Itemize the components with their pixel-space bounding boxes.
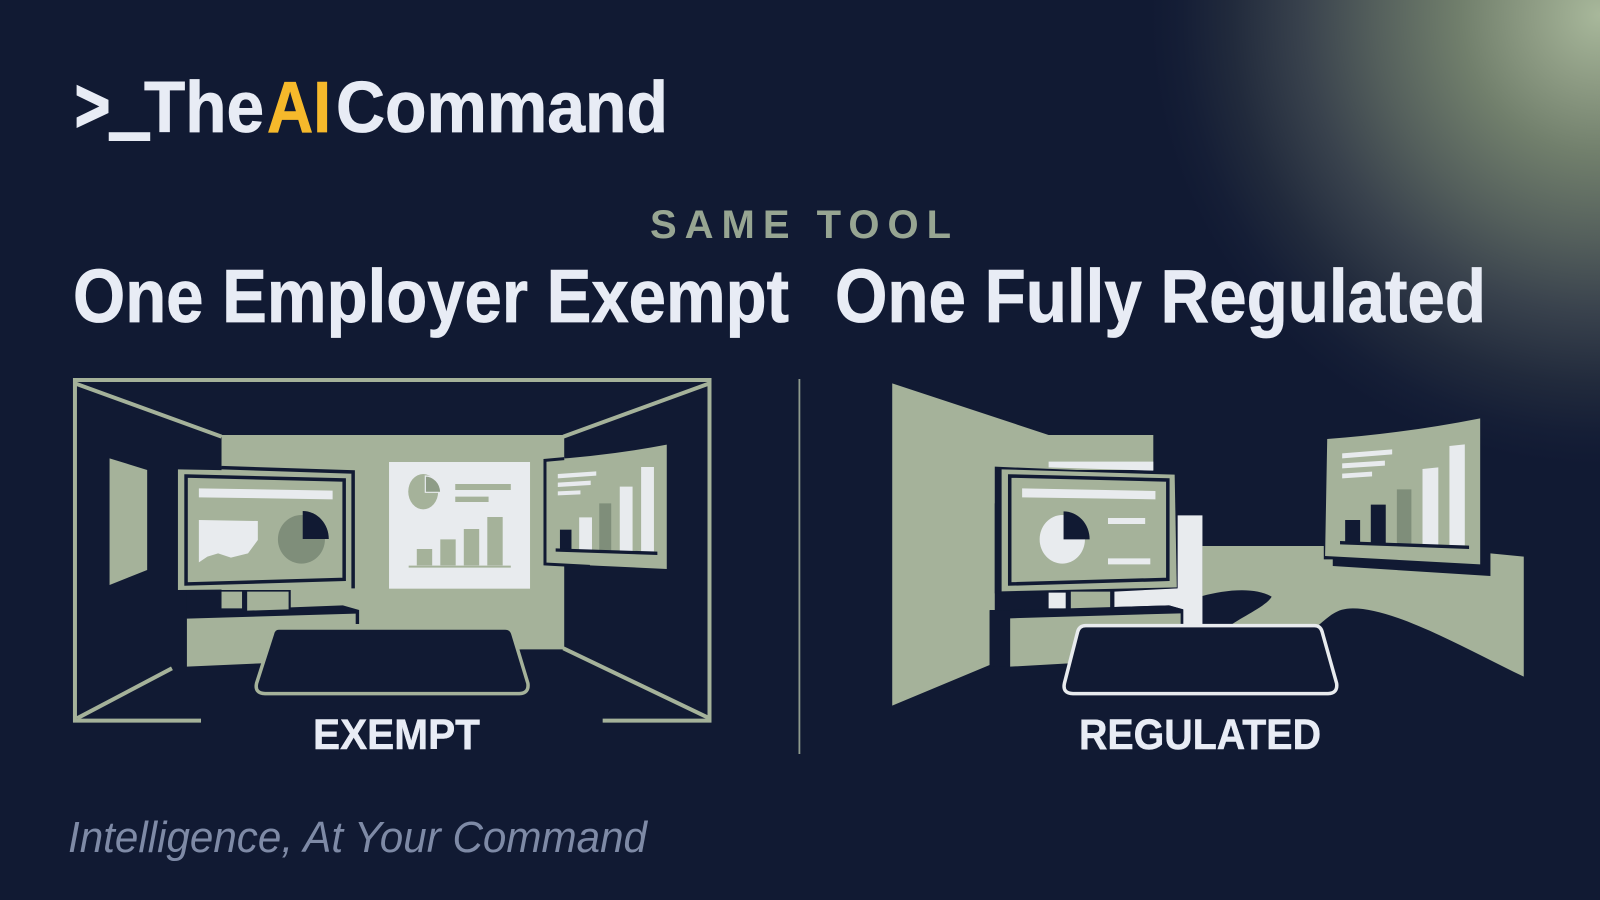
label: regulated: REGULATED bbox=[1079, 711, 1321, 759]
brand logo: Command bbox=[336, 68, 668, 148]
desk shadow bbox=[187, 590, 359, 624]
floor and back wall bbox=[1202, 546, 1524, 677]
label: exempt: EXEMPT bbox=[313, 711, 480, 759]
brand logo: AI bbox=[267, 68, 331, 148]
brand logo: > bbox=[75, 64, 110, 147]
monitor bbox=[995, 467, 1177, 593]
wall poster chart bbox=[389, 462, 530, 589]
desk front bbox=[1010, 613, 1181, 667]
tablet / table bbox=[1064, 626, 1337, 694]
divider bbox=[798, 379, 800, 754]
desk bbox=[990, 605, 1183, 667]
panel: regulated office bbox=[892, 383, 1524, 706]
corner glow bbox=[1140, 0, 1600, 470]
monitor stand bbox=[1071, 592, 1110, 611]
white wall band bbox=[1049, 462, 1153, 471]
left wall bbox=[892, 383, 1153, 706]
icon: left wall panel bbox=[110, 458, 147, 585]
side screen bar chart bbox=[545, 445, 667, 569]
white pillar bbox=[1049, 515, 1202, 626]
monitor stand bbox=[222, 592, 289, 611]
side screen bar chart bbox=[1325, 418, 1480, 564]
brand logo bbox=[75, 64, 668, 148]
brand logo: _ bbox=[111, 65, 148, 145]
headline: One Employer Exempt bbox=[73, 254, 789, 338]
floor shadow bbox=[1202, 590, 1272, 624]
brand logo: The bbox=[144, 68, 264, 148]
room outline bbox=[75, 380, 709, 721]
monitor bbox=[178, 468, 354, 590]
back wall bbox=[187, 435, 564, 667]
panel: exempt office bbox=[75, 380, 709, 721]
headline bbox=[73, 254, 1486, 338]
tablet / table bbox=[256, 628, 528, 694]
eyebrow: same tool: SAME TOOL bbox=[650, 203, 951, 247]
headline: One Fully Regulated bbox=[835, 254, 1486, 338]
tagline: Intelligence, At Your Command bbox=[68, 813, 648, 862]
